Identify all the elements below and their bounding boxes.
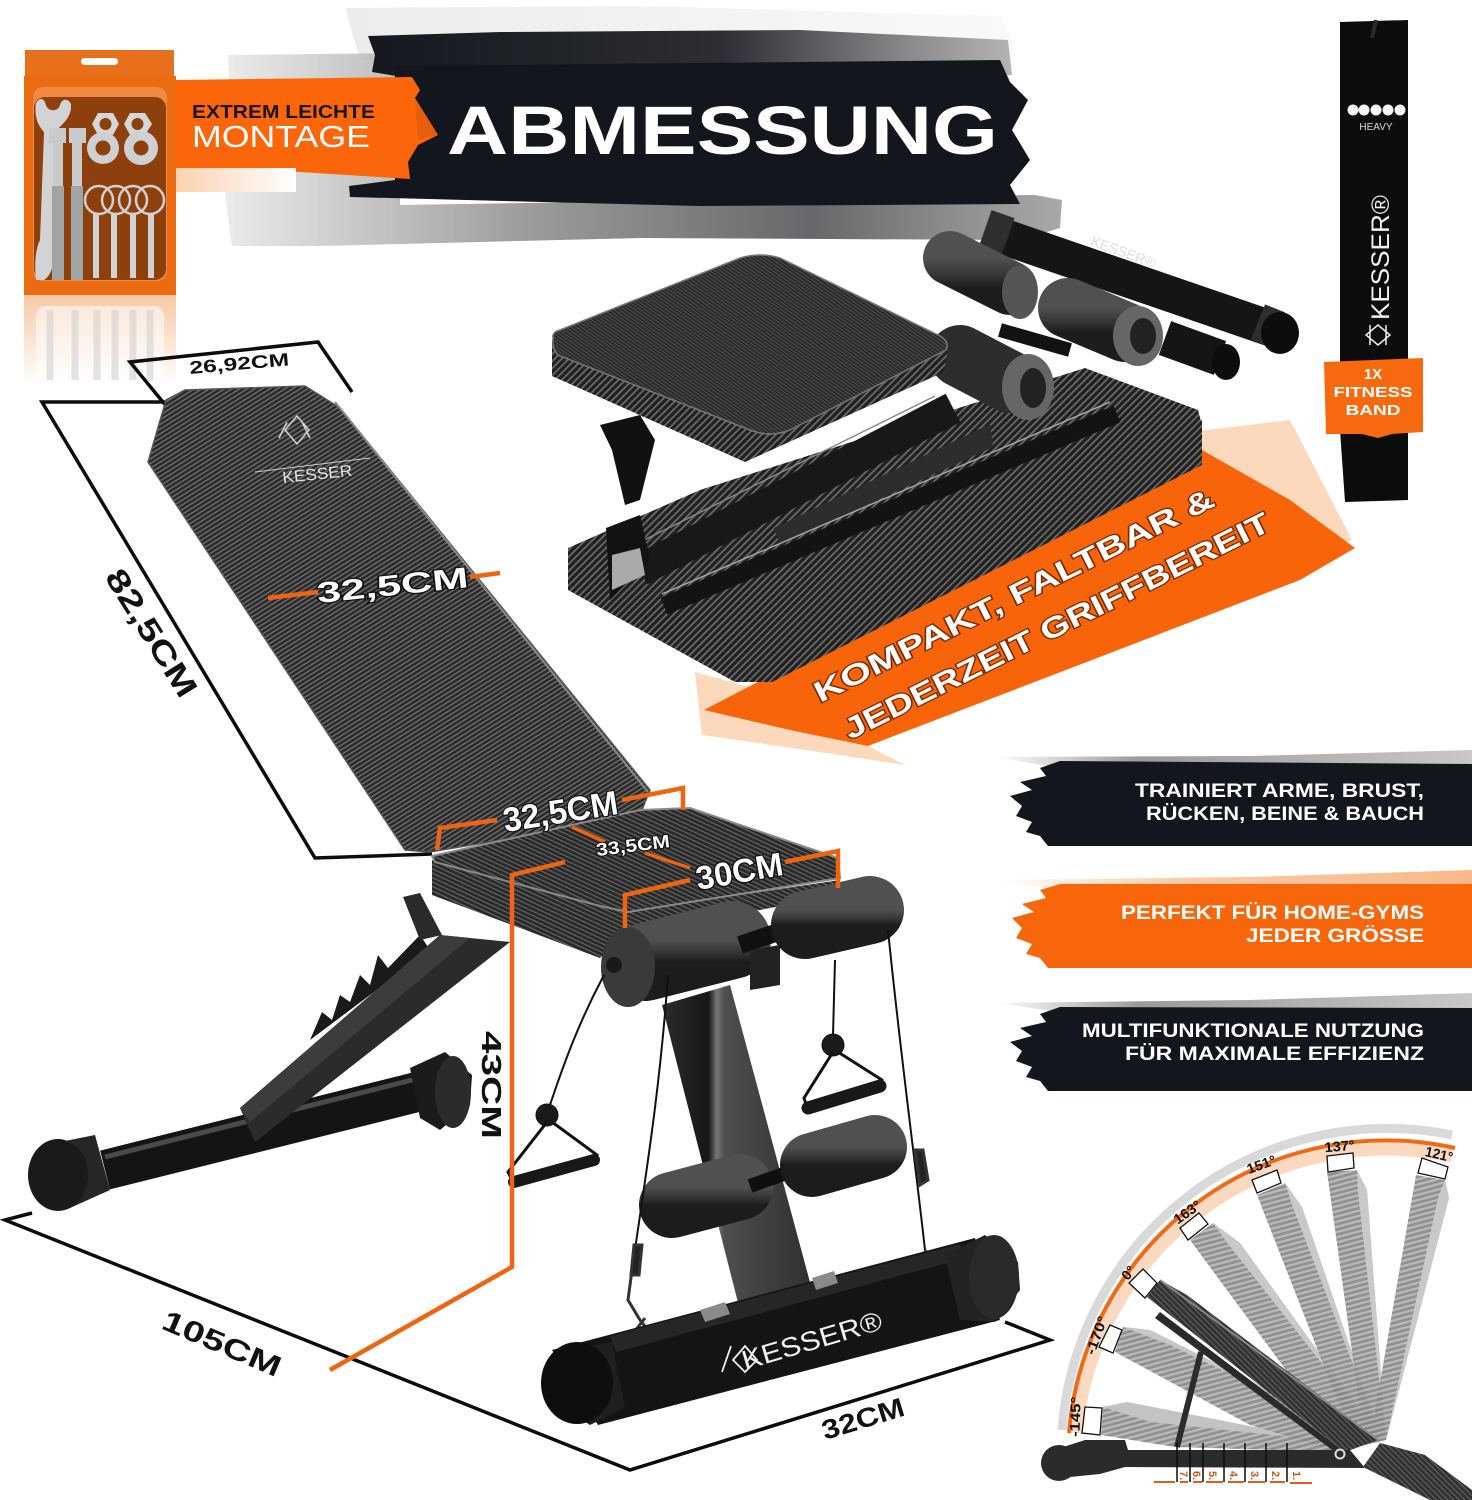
fitness band xyxy=(1324,20,1423,502)
orange band tag: BAND xyxy=(1346,402,1401,419)
orange band tag: FITNESS xyxy=(1334,384,1412,401)
folded frame bars xyxy=(600,396,1117,606)
backrest width: 32,5CM xyxy=(315,562,470,610)
rear support with teeth xyxy=(240,893,510,1142)
title: ABMESSUNG xyxy=(447,92,998,169)
notch scale xyxy=(1154,1482,1312,1483)
panel: trains arms callout: TRAINIERT ARME, BRUST, xyxy=(1135,781,1424,802)
notch numbers: 7. xyxy=(1177,1471,1189,1480)
nuts and washers xyxy=(87,113,158,165)
orange compact banner xyxy=(695,420,1355,765)
folded seat pad xyxy=(552,255,948,462)
base and foot xyxy=(1041,1440,1472,1500)
panel: trains arms callout: RÜCKEN, BEINE & BAUCH xyxy=(1146,804,1424,825)
panel: multifunctional callout xyxy=(995,993,1472,1091)
faded backrest positions xyxy=(1101,1170,1449,1452)
angle labels: -145° xyxy=(1066,1397,1084,1437)
panel: home gym callout xyxy=(995,870,1472,968)
folded foot tube: KESSER® xyxy=(1089,233,1158,271)
orange measuring lines xyxy=(268,573,838,1370)
notch numbers: 5. xyxy=(1206,1471,1218,1480)
panel: folded bench xyxy=(552,229,1299,682)
band brand: KESSER® xyxy=(1367,194,1395,320)
compact banner text xyxy=(809,483,1276,746)
width 26,92: 26,92CM xyxy=(189,349,290,378)
dimension labels xyxy=(98,349,908,1446)
angle labels: 137° xyxy=(1324,1137,1355,1155)
height: 43CM xyxy=(476,1031,507,1139)
folded rollers xyxy=(950,258,1163,420)
band strength dots xyxy=(1348,104,1406,116)
carabiners xyxy=(628,1150,935,1345)
package card xyxy=(24,50,176,295)
bolts xyxy=(49,128,86,280)
band label heavy: HEAVY xyxy=(1359,122,1393,133)
panel: assembly kit package xyxy=(24,50,176,385)
angle labels: 151° xyxy=(1244,1152,1278,1177)
angle labels: 0° xyxy=(1118,1263,1139,1283)
banner text: MONTAGE xyxy=(192,119,370,154)
orange band tag xyxy=(1324,358,1423,438)
dimension frame lines xyxy=(5,342,1050,1470)
resistance cables and handles xyxy=(508,930,935,1345)
rear foot tube xyxy=(28,1052,472,1211)
panel: home gym callout: PERFEKT FÜR HOME-GYMS xyxy=(1121,903,1424,924)
right handle xyxy=(804,1034,882,1110)
notch numbers: 6. xyxy=(1190,1471,1202,1480)
ring pins xyxy=(85,186,164,278)
orange montage banner xyxy=(176,77,438,192)
package reflection xyxy=(24,295,176,385)
length 82,5: 82,5CM xyxy=(98,562,205,704)
compact banner text: JEDERZEIT GRIFFBEREIT xyxy=(839,507,1276,746)
notch numbers xyxy=(1177,1471,1302,1480)
foot width: 32CM xyxy=(818,1392,908,1446)
lower rollers xyxy=(672,1147,875,1205)
upper rollers xyxy=(601,910,870,1007)
panel: trains arms callout xyxy=(995,750,1472,846)
panel: home gym callout: JEDER GRÖSSE xyxy=(1246,926,1424,947)
seat length: 33,5CM xyxy=(595,831,671,860)
banner text xyxy=(192,101,375,154)
panel: multifunctional callout: FÜR MAXIMALE EFFIZIENZ xyxy=(1125,1044,1424,1065)
active backrest position xyxy=(1147,1280,1378,1452)
foot tube logo: KESSER® xyxy=(738,1306,886,1376)
backrest logo xyxy=(255,416,370,487)
angle labels xyxy=(1066,1137,1455,1437)
bench length: 105CM xyxy=(157,1305,286,1384)
angle label boxes xyxy=(1082,1153,1448,1435)
front leg xyxy=(662,985,818,1330)
main bench xyxy=(28,386,1020,1425)
backrest logo: KESSER xyxy=(282,463,353,487)
folded backrest board xyxy=(568,368,1202,682)
header brush background xyxy=(225,6,1062,246)
front foot tube xyxy=(541,1235,1020,1425)
wrench xyxy=(35,99,71,280)
folded foot tube xyxy=(985,229,1299,380)
orange band tag: 1X xyxy=(1364,366,1382,383)
panel: backrest angle adjustment xyxy=(1041,1128,1472,1500)
backrest pad xyxy=(148,386,650,852)
notch numbers: 2. xyxy=(1269,1471,1281,1480)
panel: multifunctional callout: MULTIFUNKTIONALE NUTZUNG xyxy=(1082,1021,1424,1042)
angle labels: 121° xyxy=(1424,1143,1455,1165)
angle labels: -170° xyxy=(1082,1314,1111,1357)
angle labels: 163° xyxy=(1170,1197,1204,1227)
notch numbers: 3. xyxy=(1248,1471,1260,1480)
seat rear width: 32,5CM xyxy=(500,784,621,840)
notch numbers: 1. xyxy=(1290,1471,1302,1480)
angle arc xyxy=(1062,1128,1455,1433)
notch lines xyxy=(1177,1443,1287,1482)
seat front width: 30CM xyxy=(693,845,786,897)
left handle xyxy=(508,1104,597,1184)
compact banner text: KOMPAKT, FALTBAR & xyxy=(809,483,1220,709)
seat pad xyxy=(432,808,840,958)
banner text: EXTREM LEICHTE xyxy=(192,101,375,122)
notch numbers: 4. xyxy=(1227,1471,1239,1480)
